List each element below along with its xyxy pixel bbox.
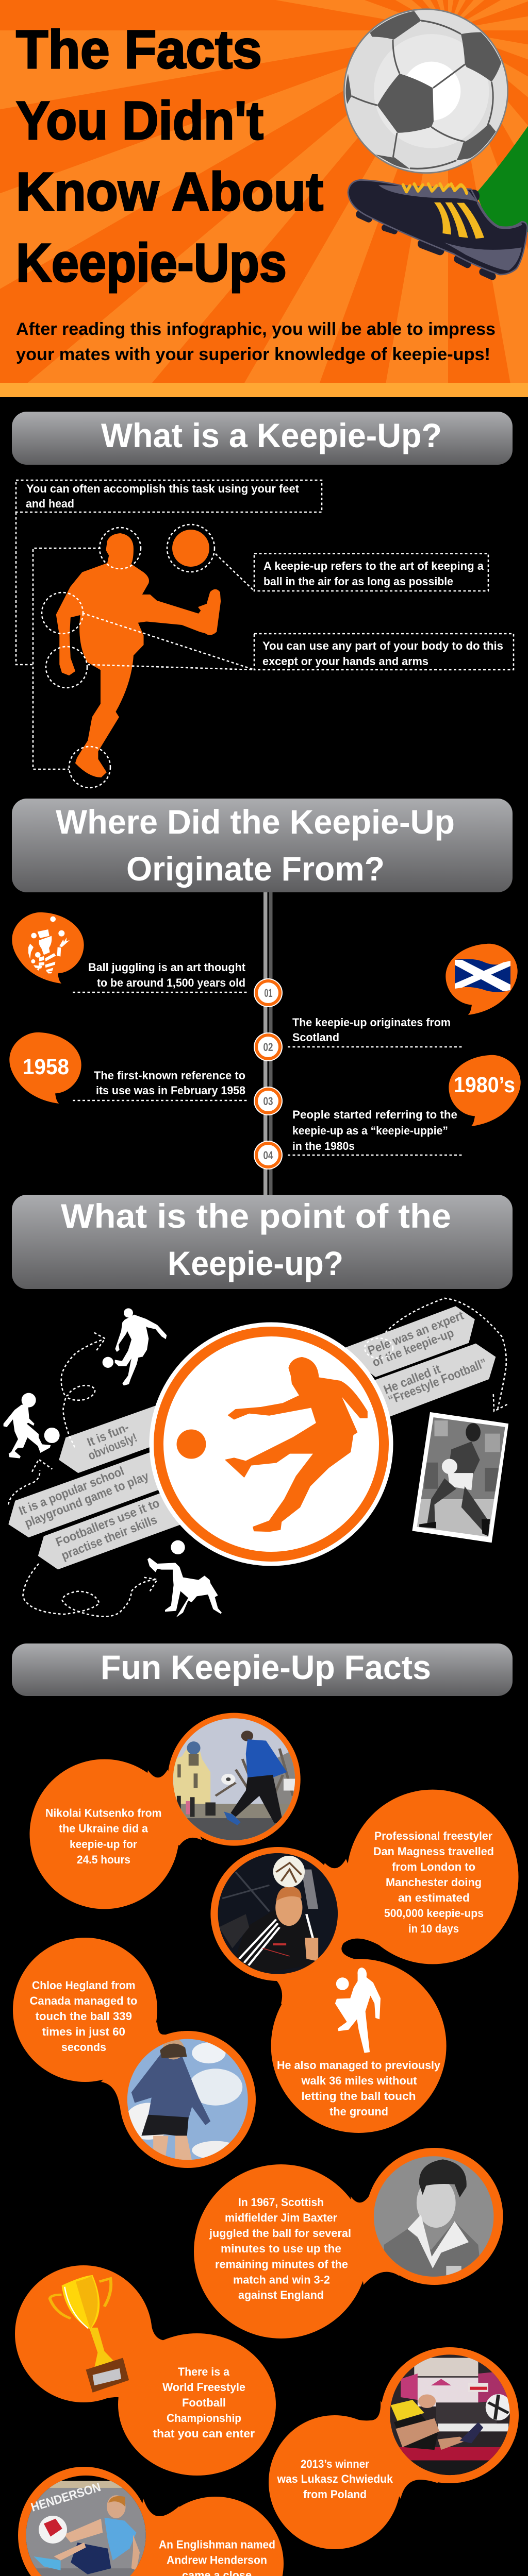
speech bubble: scotland	[446, 944, 518, 1015]
silhouette: child kicker	[4, 1393, 60, 1459]
text: nikolai: keepie-up for	[70, 1838, 137, 1851]
silhouette: kicking player	[226, 1358, 367, 1531]
photo: woman against sky	[125, 2037, 253, 2163]
dashed arrow: to overhead kicker	[23, 1564, 157, 1617]
text: keepie-uppie	[292, 1108, 457, 1153]
dashed arrow: to child kicker	[8, 1460, 52, 1504]
text: championship: Championship	[167, 2412, 241, 2425]
text: 36 miles: the ground	[329, 2105, 388, 2118]
text: baxter: In 1967, Scottish	[238, 2196, 324, 2209]
dashed arrow: to pele photo	[365, 1298, 509, 1411]
silhouette: kicking player	[57, 534, 220, 777]
text: scotland	[292, 1016, 451, 1044]
text: keepie-uppie: People started referring to the	[292, 1108, 457, 1121]
text: baxter	[209, 2196, 351, 2301]
photo: andrew henderson	[24, 2475, 148, 2576]
text: dan magness: 500,000 keepie-ups	[384, 1907, 484, 1920]
text: 36 miles	[277, 2059, 441, 2118]
panel: hero banner	[0, 0, 528, 397]
fact bubble: world championship	[15, 2265, 276, 2476]
timeline node 01: 01	[264, 987, 272, 999]
panel: what is a keepie-up	[12, 412, 514, 788]
fact bubble: nikolai kutsenko	[30, 1713, 303, 1909]
icon: gold trophy	[50, 2275, 129, 2393]
callout: any part of your body	[254, 634, 514, 670]
text: chloe: Canada managed to	[30, 1994, 137, 2007]
timeline spine	[263, 892, 272, 1195]
subtitle: After reading this infographic, you will be able to impress	[16, 319, 496, 339]
timeline node 04: 04	[263, 1149, 273, 1162]
text: chloe: times in just 60	[42, 2025, 125, 2038]
text: nikolai: 24.5 hours	[77, 1853, 130, 1866]
ribbon text: freestyle football: “Freestyle Football”	[386, 1356, 489, 1408]
title: Keepie-Ups	[16, 233, 287, 293]
text: ball juggling: Ball juggling is an art thought	[88, 961, 246, 974]
timeline node 04	[254, 1141, 283, 1170]
text: 36 miles: He also managed to previously	[277, 2059, 441, 2072]
speech bubble: juggler	[12, 912, 84, 984]
title: The Facts	[16, 20, 262, 80]
timeline node 02	[254, 1032, 283, 1061]
heading bar: origin	[12, 799, 513, 892]
text: baxter: midfielder Jim Baxter	[225, 2211, 337, 2224]
title: You Didn't	[16, 91, 263, 151]
text: henderson: An Englishman named	[159, 2538, 275, 2551]
fact bubble: 2013 winner	[269, 2347, 519, 2549]
heading bar: fun facts: Fun Keepie-Up Facts	[101, 1648, 431, 1686]
text: baxter: minutes to use up the	[221, 2242, 341, 2255]
text: chloe: Chloe Hegland from	[32, 1979, 135, 1992]
text: 2013 winner: was Lukasz Chwieduk	[277, 2472, 393, 2485]
text: 36 miles: letting the ball touch	[301, 2090, 416, 2103]
text: keepie-uppie: keepie-up as a “keepie-uppie”	[292, 1124, 448, 1137]
ribbon text: pele: Pele was an expert	[366, 1309, 466, 1358]
callout: any part of your body: You can use any part of your body to do this	[262, 639, 503, 652]
heading bar: what is a keepie-up: What is a Keepie-Up?	[101, 416, 442, 454]
icon: juggling clown	[28, 917, 70, 973]
hero bottom band	[0, 383, 528, 397]
subtitle	[16, 319, 496, 364]
fact bubble: jim baxter	[194, 2148, 503, 2338]
text: dan magness: from London to	[392, 1860, 475, 1873]
text: dan magness	[373, 1829, 494, 1935]
text: championship: World Freestyle	[162, 2381, 245, 2394]
icon: orange ball	[176, 1429, 206, 1459]
speech bubble: 1980's: 1980’s	[454, 1073, 515, 1097]
heading bar: origin: Originate From?	[126, 850, 385, 888]
text: baxter: juggled the ball for several	[209, 2227, 351, 2240]
icon: football	[344, 9, 508, 173]
callout: feet and head	[16, 480, 322, 512]
heading bar: origin: Where Did the Keepie-Up	[56, 803, 455, 841]
callout: any part of your body: except or your hands and arms	[262, 655, 428, 668]
text: nikolai: the Ukraine did a	[59, 1822, 148, 1835]
ribbon text: it is fun: obviously!	[86, 1431, 139, 1463]
text: dan magness: Professional freestyler	[374, 1829, 492, 1842]
panel: fun keepie-up facts	[12, 1643, 519, 2576]
icon: player juggling on knee	[335, 1968, 381, 2053]
text: championship: that you can enter	[153, 2427, 255, 2440]
photo caption: henderson: HENDERSON	[29, 2480, 103, 2515]
text: first-known reference: its use was in February 1958	[96, 1084, 245, 1097]
dashed arrow: to adult kicker	[61, 1333, 105, 1447]
text: ball juggling	[88, 961, 246, 989]
ribbon text: footballers: practise their skills	[59, 1513, 159, 1563]
title	[16, 20, 323, 293]
ribbons	[8, 1306, 496, 1569]
photo: pele	[411, 1412, 512, 1544]
subtitle: your mates with your superior knowledge of keepie-ups!	[16, 345, 490, 364]
sunburst rays	[0, 0, 528, 383]
heading bar: point of the keepie-up: What is the point of the	[61, 1197, 451, 1235]
text: chloe: touch the ball 339	[36, 2010, 132, 2023]
speech bubble: 1958: 1958	[23, 1055, 69, 1079]
text: dan magness: Dan Magness travelled	[373, 1845, 494, 1858]
text: 2013 winner: 2013’s winner	[301, 2458, 369, 2470]
text: 2013 winner: from Poland	[303, 2488, 367, 2501]
photo: ball on head	[216, 1851, 340, 1977]
callout: art of keeping a ball: A keepie-up refers to the art of keeping a	[263, 560, 484, 572]
text: dan magness: in 10 days	[408, 1922, 459, 1935]
text: baxter: against England	[238, 2289, 324, 2301]
fact bubble: dan magness	[210, 1790, 518, 2133]
dotted timeline rules	[73, 992, 464, 1155]
heading bar: what is a keepie-up	[12, 412, 513, 465]
ribbon text: freestyle football: He called it	[382, 1362, 442, 1397]
text: chloe	[30, 1979, 137, 2054]
text: keepie-uppie: in the 1980s	[292, 1140, 355, 1153]
text: nikolai: Nikolai Kutsenko from	[45, 1806, 162, 1820]
timeline node 03	[254, 1087, 283, 1115]
text: championship: Football	[182, 2396, 226, 2409]
speech bubble: 1958	[9, 1032, 81, 1104]
text: 2013 winner	[277, 2458, 393, 2501]
centre badge	[150, 1322, 393, 1566]
text: championship: There is a	[178, 2365, 230, 2378]
callout: art of keeping a ball: ball in the air for as long as possible	[263, 575, 453, 588]
silhouette: adult kicker	[103, 1308, 167, 1385]
text: first-known reference	[94, 1069, 245, 1097]
panel: where did the keepie-up originate from	[9, 799, 521, 1195]
text: 36 miles: walk 36 miles without	[301, 2074, 417, 2087]
ribbon text: playground game: It is a popular school	[17, 1464, 126, 1518]
text: henderson	[159, 2538, 275, 2576]
text: championship	[153, 2365, 255, 2440]
heading bar: point of the keepie-up: Keepie-up?	[168, 1244, 343, 1282]
speech bubble: 1980's	[449, 1055, 521, 1126]
text: baxter: remaining minutes of the	[215, 2258, 348, 2271]
text: first-known reference: The first-known reference to	[94, 1069, 245, 1082]
ribbon text: pele: of the keepie-up	[370, 1326, 456, 1370]
photo: 2013 championship	[390, 2354, 510, 2475]
callout: feet and head: and head	[26, 497, 74, 510]
timeline node 01	[254, 978, 283, 1007]
ribbon text: it is fun: It is fun-	[85, 1420, 131, 1450]
icon: scottish flag	[455, 959, 510, 992]
icon: orange ball	[172, 530, 209, 567]
fact bubble: andrew henderson	[18, 2467, 284, 2576]
callout: feet and head: You can often accomplish this task using your feet	[26, 482, 300, 495]
text: chloe: seconds	[61, 2041, 106, 2054]
heading bar: fun facts	[12, 1643, 513, 1696]
text: baxter: match and win 3-2	[233, 2273, 330, 2286]
icon: football boot	[348, 180, 527, 276]
panel: what is the point	[4, 1195, 513, 1617]
text: dan magness: an estimated	[398, 1891, 470, 1904]
text: scotland: The keepie-up originates from	[292, 1016, 451, 1029]
callout: art of keeping a ball	[254, 553, 488, 591]
text: scotland: Scotland	[292, 1031, 339, 1044]
timeline node 03: 03	[263, 1095, 273, 1108]
dashed target circles	[16, 512, 254, 788]
photo: jim baxter portrait	[370, 2156, 499, 2279]
heading bar: point of the keepie-up	[12, 1195, 513, 1289]
fact bubble: chloe hegland	[13, 1938, 256, 2168]
title: Know About	[16, 162, 323, 222]
timeline node 02: 02	[263, 1041, 273, 1054]
text: ball juggling: to be around 1,500 years old	[97, 976, 245, 989]
ribbon text: footballers: Footballers use it to	[54, 1496, 161, 1550]
silhouette: overhead kicker	[147, 1540, 222, 1617]
ribbon text: playground game: playground game to play	[23, 1469, 151, 1531]
text: dan magness: Manchester doing	[386, 1876, 482, 1889]
text: nikolai	[45, 1806, 162, 1866]
text: henderson: Andrew Henderson	[167, 2553, 267, 2567]
photo: keepie-up by cathedral	[173, 1718, 295, 1840]
icon: green leg	[476, 126, 528, 232]
